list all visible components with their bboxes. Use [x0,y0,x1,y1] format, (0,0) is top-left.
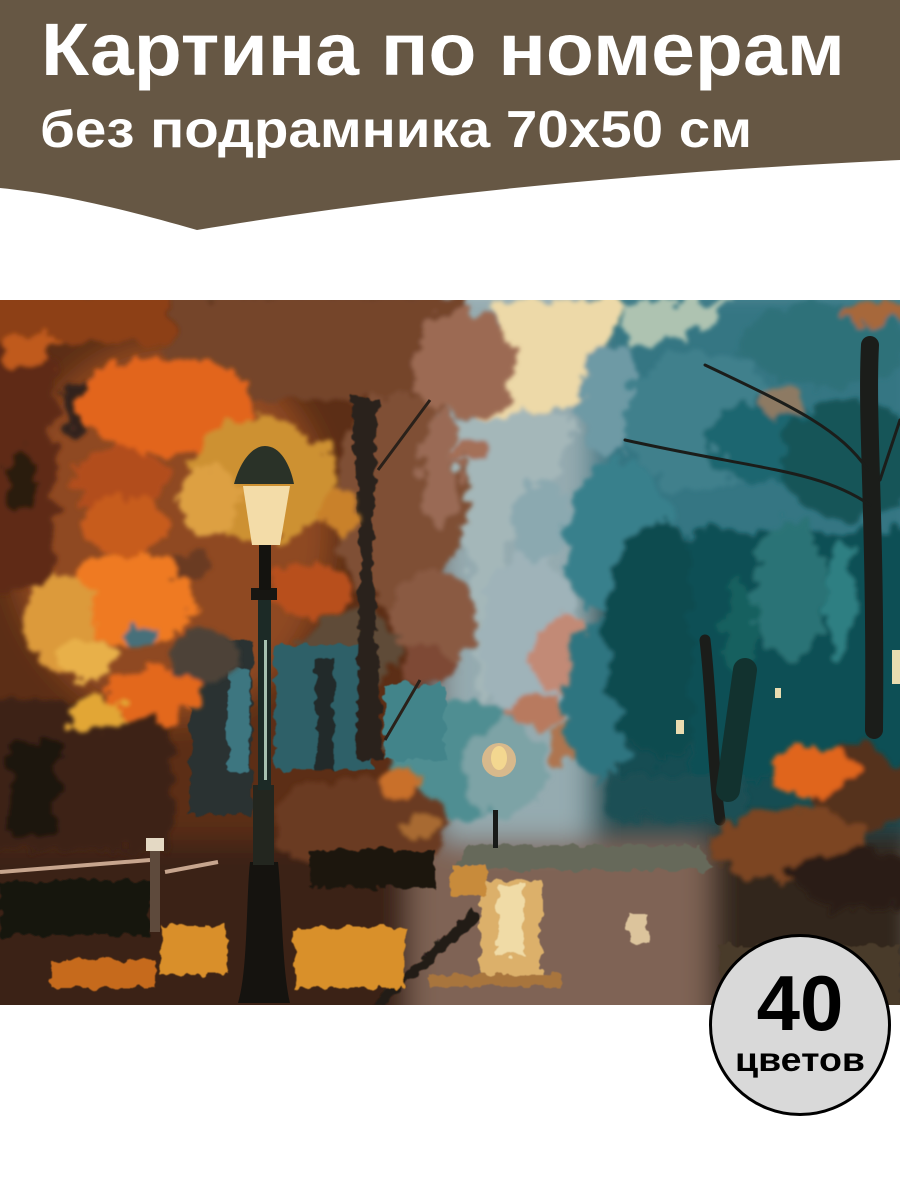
badge label: цветов [735,1041,865,1078]
street lamp [234,446,294,1003]
painting underpainting [0,280,900,1040]
brown canopy [170,295,515,690]
subtitle: без подрамника 70х50 см [40,101,752,159]
orange and gold foliage [28,357,362,732]
bushes [272,745,900,910]
header banner [0,0,900,230]
fence [0,838,218,932]
title: Картина по номерам [41,8,845,91]
blue gap and mid trunks [190,395,445,815]
right window lights [676,650,900,734]
distant lamp [482,743,516,848]
badge number: 40 [757,959,843,1047]
ground and wet path [0,845,900,1010]
sky and mist [390,300,730,820]
badge: 40 colours [710,936,890,1114]
blue-teal trees on the right [562,302,900,820]
dark trunks on the right [625,345,900,820]
painting: autumn park with street lamp [0,280,900,1040]
canopy branches [378,400,430,740]
left dark foliage [0,290,170,850]
